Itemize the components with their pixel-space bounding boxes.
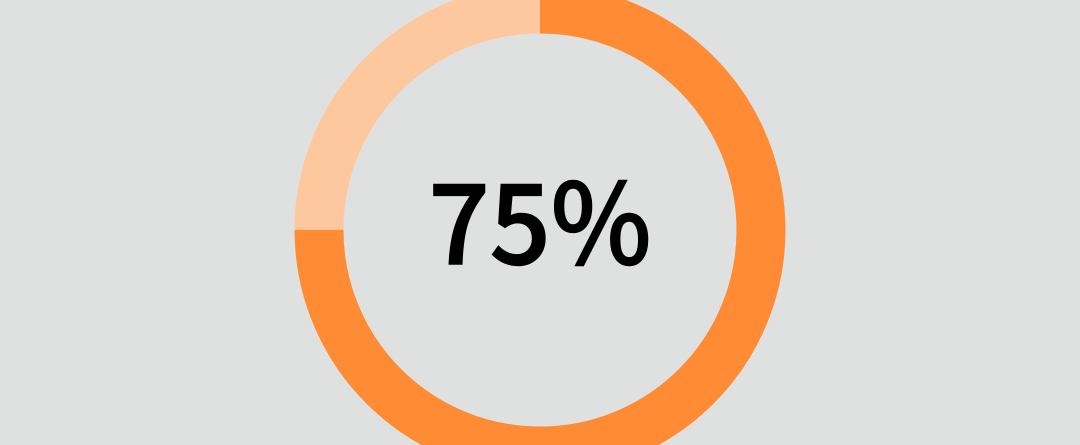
center value label: 75% [428,135,652,296]
remaining 25% ring segment [319,9,540,230]
filled 75% ring segment [319,9,761,445]
